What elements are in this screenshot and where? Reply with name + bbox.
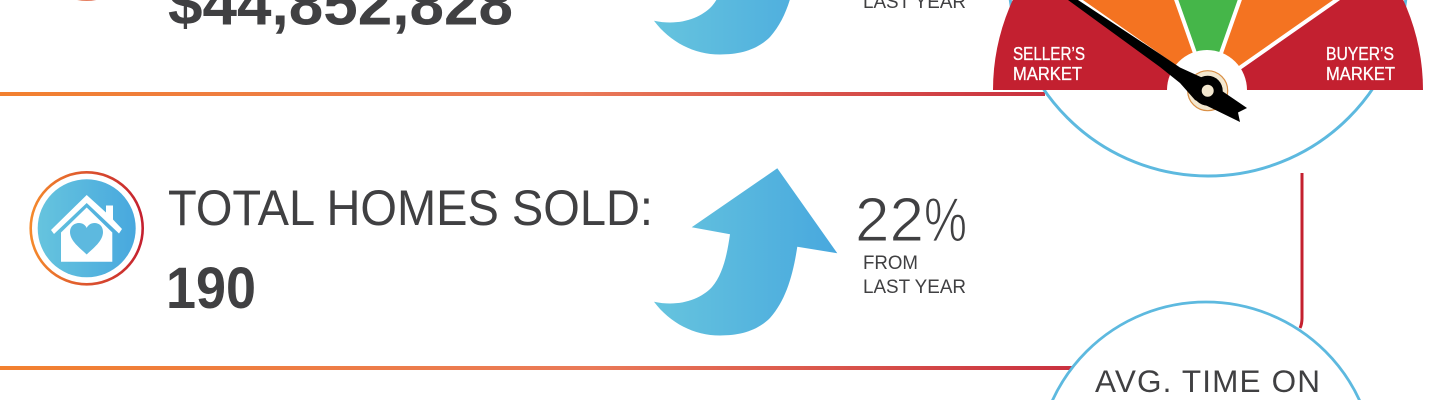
heading: total homes sold: TOTAL HOMES SOLD: (168, 180, 653, 236)
caption: from last year: FROM (863, 252, 918, 274)
icon: house with heart (31, 172, 143, 284)
gauge hub and needle (1060, 0, 1247, 122)
caption: from last year (863, 252, 966, 298)
value: homes sold: 190 (166, 256, 256, 321)
label: buyer's market: BUYER’S (1326, 44, 1394, 64)
label: seller's market: MARKET (1013, 64, 1082, 84)
divider line: upper (0, 92, 1045, 96)
panel: time on market circle (1037, 302, 1375, 400)
arrow: previous stat up arrow (654, 0, 837, 54)
connector line between gauge and time on market (1300, 173, 1302, 328)
label: buyer's market: MARKET (1326, 64, 1395, 84)
label: buyer's market (1326, 44, 1395, 84)
label: seller's market: SELLER’S (1013, 44, 1085, 64)
percent change: 22 (855, 186, 924, 255)
gauge: market meter (993, 0, 1423, 178)
divider line: lower (0, 366, 1074, 370)
heading: avg. time on: AVG. TIME ON (1095, 363, 1320, 399)
percent change: % (924, 186, 967, 255)
arrow: up trend (654, 168, 837, 336)
label: seller's market (1013, 44, 1085, 84)
caption: from last year: LAST YEAR (863, 276, 966, 298)
gauge outer circle (1009, 0, 1407, 176)
gauge coloured bands (993, 0, 1423, 90)
